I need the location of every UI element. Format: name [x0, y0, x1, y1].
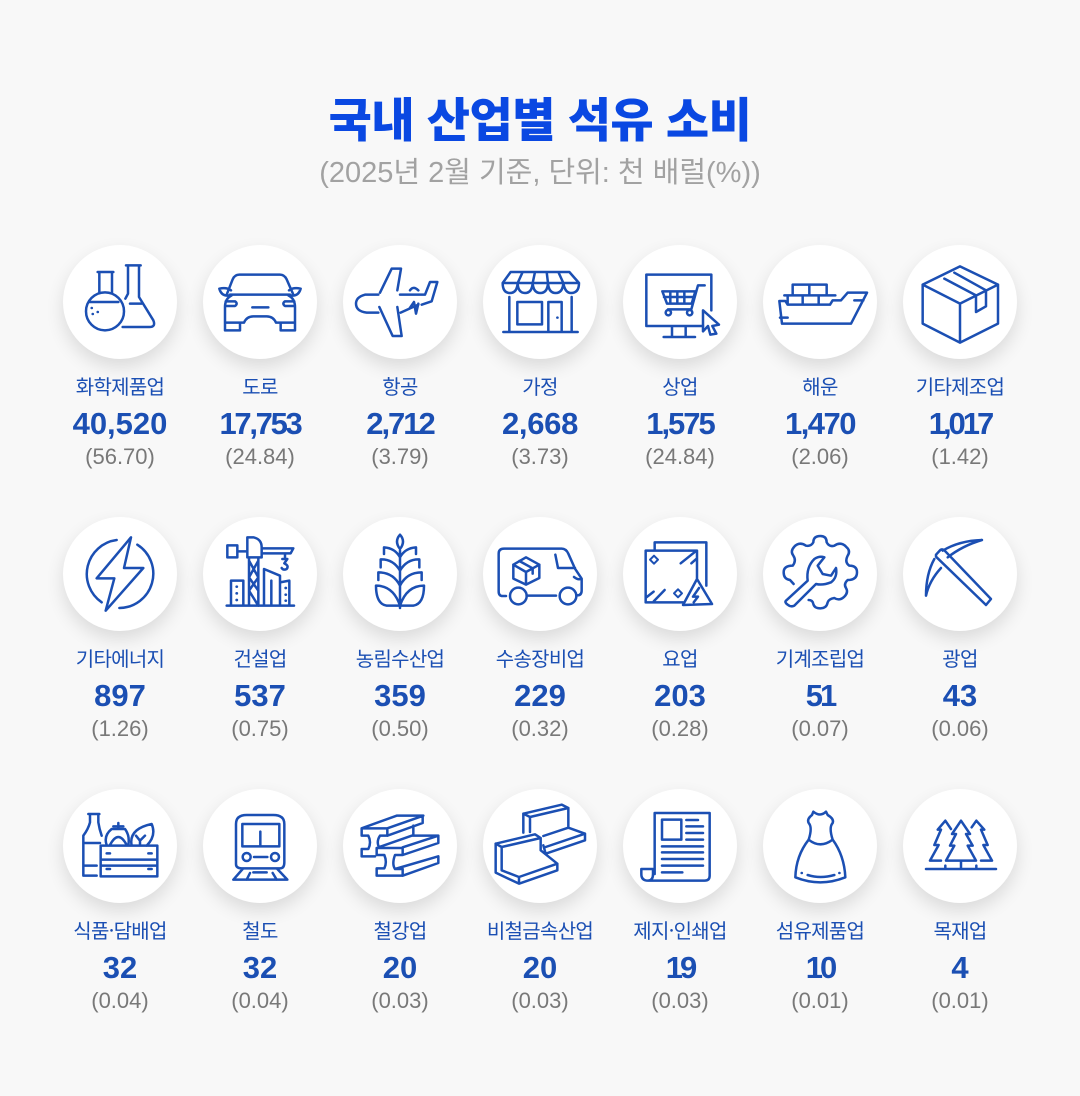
value: 51 — [806, 678, 834, 712]
panel: 목재업 — [898, 819, 1022, 1012]
panel: 화학제품업 — [58, 264, 182, 468]
value: 897 — [94, 678, 146, 712]
share: (0.03) — [371, 988, 429, 1012]
panel: 기타제조업 — [898, 265, 1022, 468]
share: (1.26) — [91, 716, 149, 740]
panel: 해운 — [758, 278, 882, 468]
icon: bottle and crate — [63, 788, 177, 902]
panel: 가정 — [478, 270, 602, 468]
value: 2,712 — [366, 406, 434, 440]
share: (0.03) — [511, 988, 569, 1012]
icon: crane and buildings — [203, 516, 317, 630]
panel: 기타에너지 — [58, 536, 182, 740]
icon: pickaxe — [903, 516, 1017, 630]
label: 식품·담배업 — [73, 914, 167, 944]
value: 359 — [374, 678, 426, 712]
panel: 상업 — [618, 273, 742, 468]
value: 537 — [234, 678, 286, 712]
value: 20 — [383, 950, 417, 984]
label: 제지·인쇄업 — [633, 914, 727, 944]
value: 10 — [806, 950, 834, 984]
share: (0.04) — [231, 988, 289, 1012]
share: (0.50) — [371, 716, 429, 740]
share: (0.32) — [511, 716, 569, 740]
value: 19 — [666, 950, 694, 984]
icon: glass panes — [623, 516, 737, 630]
share: (0.04) — [91, 988, 149, 1012]
icon: online shopping monitor — [623, 244, 737, 358]
share: (3.73) — [511, 444, 569, 468]
icon: newspaper — [623, 788, 737, 902]
panel: 농림수산업 — [338, 533, 462, 740]
panel: 항공 — [338, 267, 462, 468]
share: (0.01) — [931, 988, 989, 1012]
label: 건설업 — [233, 642, 287, 672]
value: 2,668 — [502, 406, 578, 440]
panel: 비철금속산업 — [478, 803, 602, 1012]
share: (24.84) — [225, 444, 295, 468]
label: 도로 — [242, 370, 278, 400]
subtitle: (2025년 2월 기준, 단위: 천 배럴(%)) — [319, 157, 761, 189]
panel: 철강업 — [338, 814, 462, 1012]
panel: 철도 — [198, 814, 322, 1012]
share: (56.70) — [85, 444, 155, 468]
panel: 수송장비업 — [478, 547, 602, 740]
icon: lightning — [63, 516, 177, 630]
icon: gear and wrench — [763, 516, 877, 630]
label: 가정 — [522, 370, 558, 400]
icon: train — [203, 788, 317, 902]
panel: 광업 — [898, 538, 1022, 740]
label: 기계조립업 — [776, 642, 864, 672]
value: 32 — [243, 950, 277, 984]
icon: trees — [903, 788, 1017, 902]
value: 229 — [514, 678, 566, 712]
title: 국내 산업별 석유 소비 — [329, 82, 751, 151]
label: 기타제조업 — [916, 370, 1004, 400]
share: (24.84) — [645, 444, 715, 468]
label: 비철금속산업 — [487, 914, 593, 944]
panel: 제지·인쇄업 — [618, 812, 742, 1012]
icon: steel beams — [343, 788, 457, 902]
icon: car — [203, 244, 317, 358]
value: 20 — [523, 950, 557, 984]
share: (0.07) — [791, 716, 849, 740]
value: 1,575 — [646, 406, 714, 440]
icon: wheat — [343, 516, 457, 630]
label: 상업 — [662, 370, 698, 400]
panel: 건설업 — [198, 536, 322, 740]
label: 요업 — [662, 642, 698, 672]
share: (3.79) — [371, 444, 429, 468]
share: (0.01) — [791, 988, 849, 1012]
panel: 요업 — [618, 541, 742, 740]
share: (0.28) — [651, 716, 709, 740]
icon: flasks — [63, 244, 177, 358]
icon: airplane — [343, 244, 457, 358]
value: 4 — [951, 950, 969, 984]
label: 섬유제품업 — [776, 914, 864, 944]
value: 40,520 — [73, 406, 167, 440]
value: 32 — [103, 950, 137, 984]
label: 기타에너지 — [76, 642, 164, 672]
panel: 식품·담배업 — [58, 812, 182, 1012]
icon: angle metal — [483, 788, 597, 902]
icon: dress — [763, 788, 877, 902]
icon: store — [483, 244, 597, 358]
label: 농림수산업 — [356, 642, 444, 672]
icon: delivery van — [483, 516, 597, 630]
label: 철도 — [242, 914, 278, 944]
icon: cargo ship — [763, 244, 877, 358]
share: (0.75) — [231, 716, 289, 740]
label: 광업 — [942, 642, 978, 672]
value: 17,753 — [219, 406, 301, 440]
label: 철강업 — [373, 914, 427, 944]
value: 1,017 — [929, 406, 991, 440]
value: 1,470 — [785, 406, 855, 440]
icon: box — [903, 244, 1017, 358]
panel: 기계조립업 — [758, 534, 882, 740]
label: 수송장비업 — [496, 642, 584, 672]
value: 43 — [943, 678, 977, 712]
label: 해운 — [802, 370, 838, 400]
share: (0.03) — [651, 988, 709, 1012]
share: (0.06) — [931, 716, 989, 740]
value: 203 — [654, 678, 706, 712]
share: (2.06) — [791, 444, 849, 468]
label: 화학제품업 — [76, 370, 164, 400]
panel: 섬유제품업 — [758, 810, 882, 1012]
label: 항공 — [382, 370, 418, 400]
panel: 도로 — [198, 273, 322, 468]
label: 목재업 — [933, 914, 987, 944]
share: (1.42) — [931, 444, 989, 468]
